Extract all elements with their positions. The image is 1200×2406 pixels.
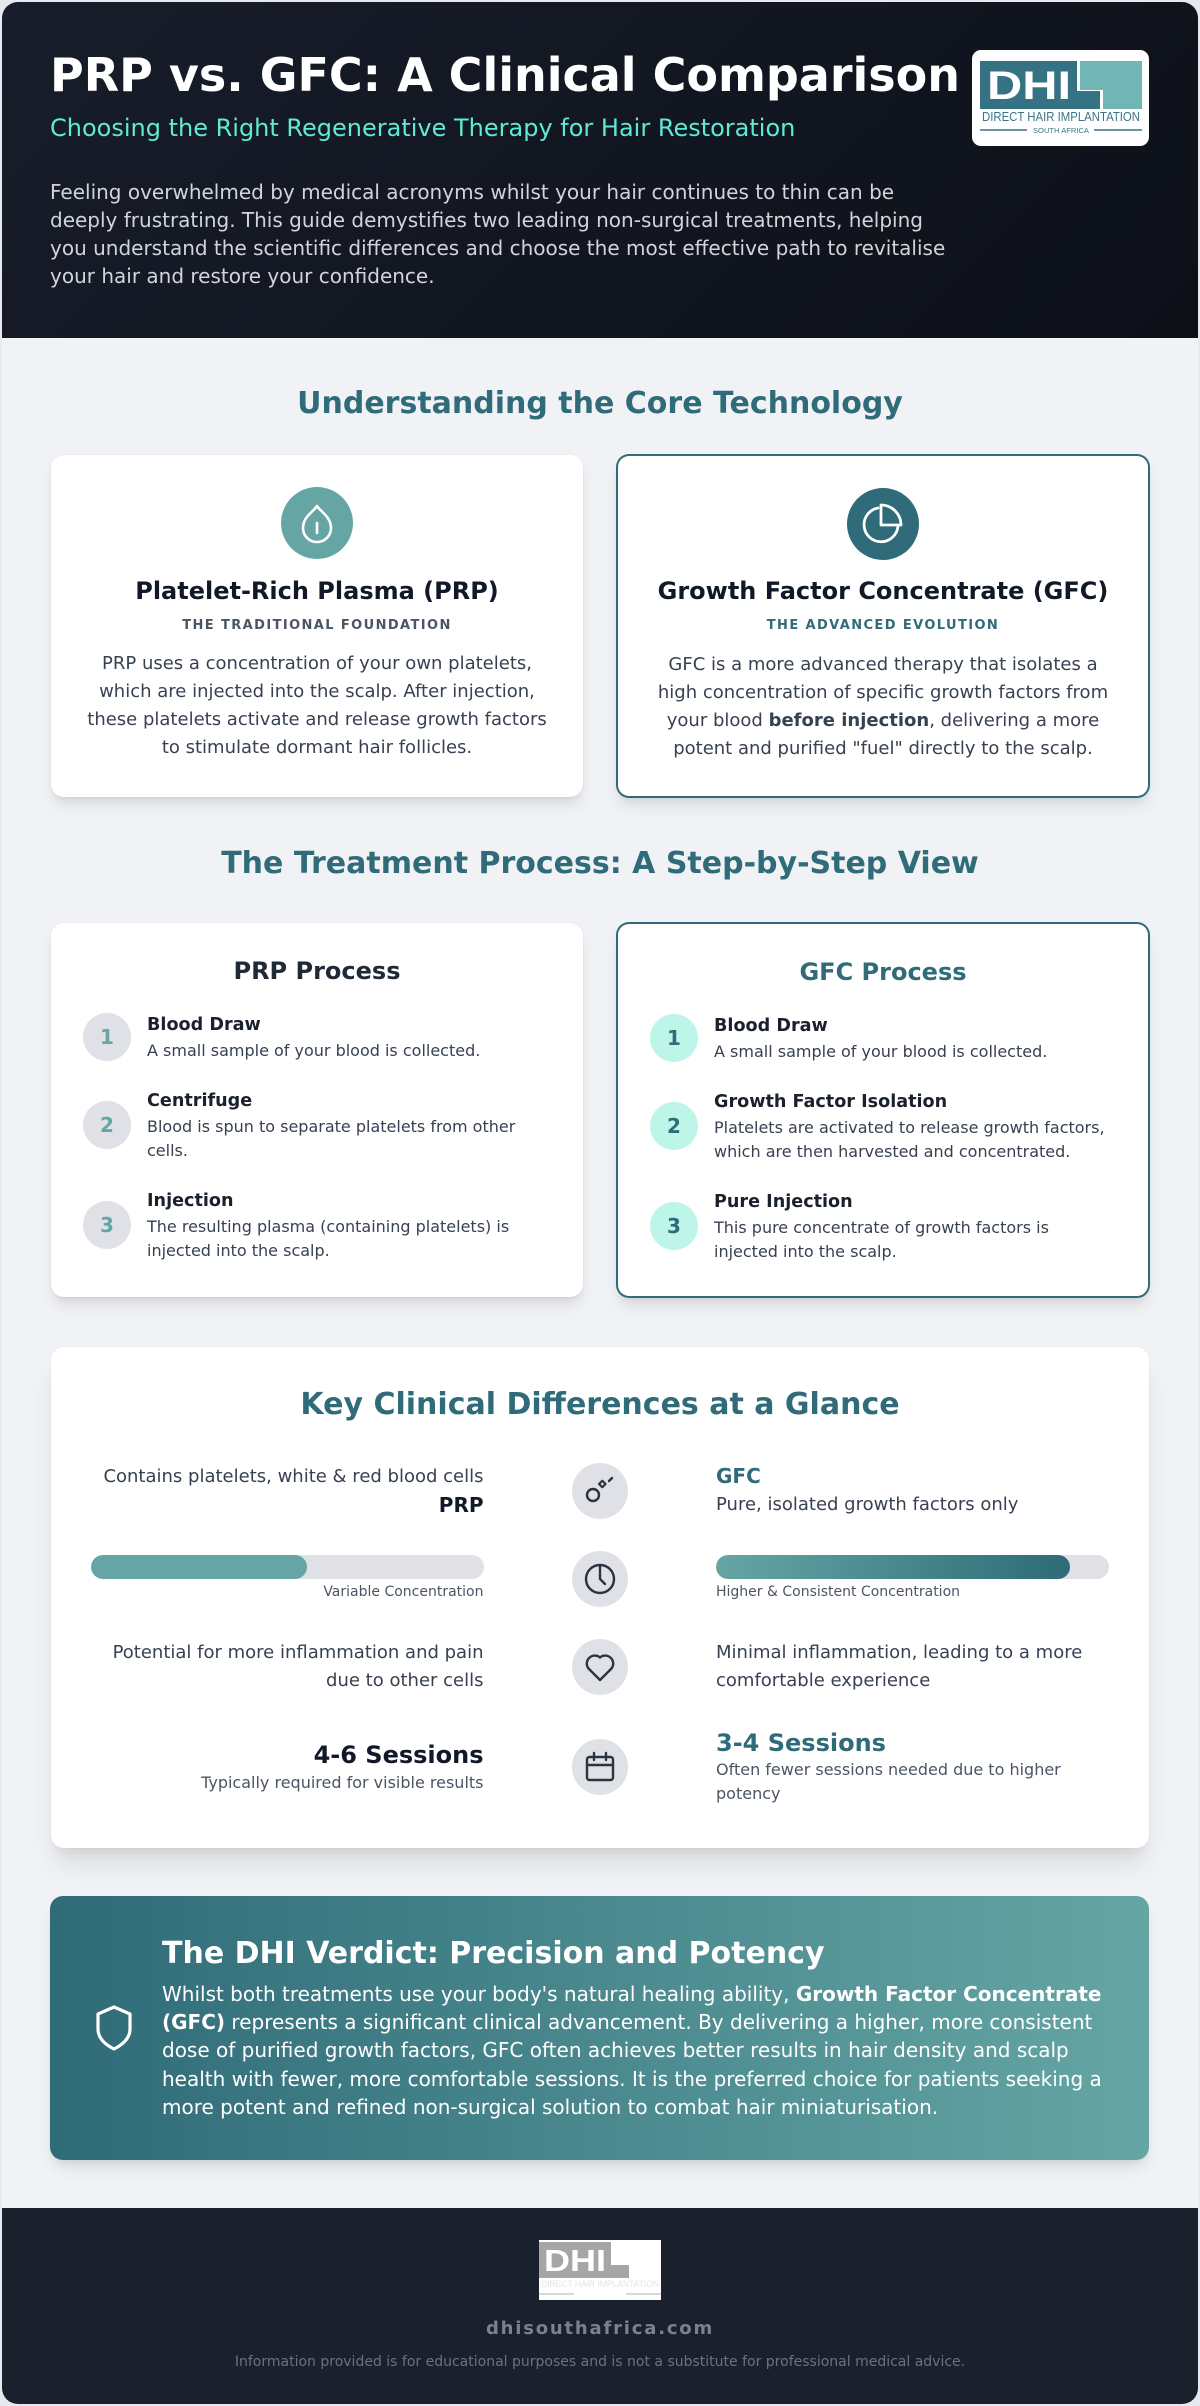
step description: A small sample of your blood is collected.	[147, 1041, 480, 1060]
step description: which are then harvested and concentrated.	[714, 1142, 1070, 1161]
disclaimer: Information provided is for educational purposes and is not a substitute for professional medical advice.	[235, 2354, 965, 2370]
step number	[650, 1202, 698, 1250]
header panel	[0, 0, 1200, 338]
card text	[658, 654, 1108, 759]
verdict text	[162, 1982, 1102, 2119]
step number: 3	[100, 1213, 114, 1237]
panel: GFC process	[616, 922, 1150, 1298]
PRP composition	[103, 1466, 484, 1517]
card text: these platelets activate and release growth factors	[87, 709, 547, 730]
PRP bar label: Variable Concentration	[323, 1584, 484, 1600]
step title: Pure Injection	[714, 1192, 853, 1212]
panel heading: Key Clinical Differences at a Glance	[300, 1386, 900, 1422]
step 3	[83, 1191, 509, 1260]
intro text: your hair and restore your confidence.	[50, 264, 435, 288]
step 3	[650, 1192, 1049, 1261]
title: PRP vs. GFC: A Clinical Comparison	[50, 48, 960, 102]
PRP sessions: 4-6 Sessions	[314, 1741, 484, 1769]
panel: GFC technology	[616, 454, 1150, 798]
GFC sessions: 3-4 Sessions	[716, 1729, 886, 1757]
verdict text: dose of purified growth factors, GFC often achieves better results in hair density and scalp	[162, 2038, 1069, 2062]
step number	[83, 1201, 131, 1249]
card title: Platelet-Rich Plasma (PRP)	[135, 577, 499, 605]
step description: This pure concentrate of growth factors is	[714, 1218, 1049, 1237]
step title: Injection	[147, 1191, 234, 1211]
card title: Growth Factor Concentrate (GFC)	[658, 577, 1108, 605]
card subtitle: THE TRADITIONAL FOUNDATION	[182, 618, 452, 633]
GFC composition	[716, 1464, 1018, 1515]
GFC composition: GFC	[716, 1464, 761, 1488]
step 2	[650, 1092, 1105, 1161]
footer logo	[539, 2240, 661, 2300]
verdict text: (GFC) represents a significant clinical advancement. By delivering a higher, more consistent	[162, 2010, 1092, 2034]
intro text: Feeling overwhelmed by medical acronyms whilst your hair continues to thin can be	[50, 180, 894, 204]
bar fill	[91, 1555, 307, 1579]
heading: core technology: Understanding the Core Technology	[297, 386, 903, 420]
panel: PRP technology	[51, 455, 583, 797]
GFC inflammation: Minimal inflammation, leading to a more	[716, 1642, 1082, 1662]
PRP concentration bar	[91, 1555, 484, 1579]
icon: pie chart	[847, 488, 919, 560]
icon: water drop	[281, 487, 353, 559]
step 1	[83, 1013, 480, 1061]
step number: 2	[667, 1114, 681, 1138]
GFC bar label: Higher & Consistent Concentration	[716, 1584, 960, 1600]
step description	[714, 1218, 1049, 1261]
step number	[83, 1013, 131, 1061]
panel: PRP process	[51, 923, 583, 1297]
intro text: you understand the scientific differences and choose the most effective path to revitalise	[50, 236, 945, 260]
intro text	[50, 180, 945, 288]
logo: DHI	[972, 50, 1149, 146]
panel: DHI verdict	[50, 1896, 1149, 2160]
GFC sessions note	[716, 1760, 1061, 1803]
intro text: deeply frustrating. This guide demystifies two leading non-surgical treatments, helping	[50, 208, 923, 232]
logo: DHI: SOUTH AFRICA	[1033, 126, 1089, 135]
step number: 2	[100, 1113, 114, 1137]
GFC inflammation: comfortable experience	[716, 1670, 930, 1690]
panel: key clinical differences	[51, 1347, 1149, 1848]
step description	[147, 1117, 516, 1160]
step description: Platelets are activated to release growth factors,	[714, 1118, 1105, 1137]
icon: heart	[572, 1639, 628, 1695]
icon: composition	[572, 1463, 628, 1519]
card text: PRP uses a concentration of your own platelets,	[102, 653, 532, 674]
card text: potent and purified "fuel" directly to the scalp.	[673, 738, 1093, 759]
verdict text: health with fewer, more comfortable sessions. It is the preferred choice for patients seeking a	[162, 2067, 1102, 2091]
step description: The resulting plasma (containing platelets) is	[147, 1217, 509, 1236]
PRP inflammation: Potential for more inflammation and pain	[113, 1642, 484, 1662]
PRP inflammation: due to other cells	[326, 1670, 484, 1690]
PRP composition: PRP	[439, 1493, 484, 1517]
step description: cells.	[147, 1141, 188, 1160]
step number: 3	[667, 1214, 681, 1238]
step description: Blood is spun to separate platelets from other	[147, 1117, 515, 1136]
GFC concentration bar	[716, 1555, 1109, 1579]
icon: calendar	[572, 1739, 628, 1795]
step title: Growth Factor Isolation	[714, 1092, 947, 1112]
step number: 1	[667, 1026, 681, 1050]
website: dhisouthafrica.com	[486, 2318, 714, 2339]
card text: which are injected into the scalp. After injection,	[99, 681, 535, 702]
verdict text: more potent and refined non-surgical solution to combat hair miniaturisation.	[162, 2095, 938, 2119]
card text	[87, 653, 547, 758]
step description: injected into the scalp.	[714, 1242, 897, 1261]
verdict heading: The DHI Verdict: Precision and Potency	[162, 1936, 825, 1971]
card text: to stimulate dormant hair follicles.	[162, 737, 472, 758]
step number	[83, 1101, 131, 1149]
footer panel	[0, 2208, 1200, 2406]
step title: Blood Draw	[147, 1015, 261, 1035]
icon: clock	[572, 1551, 628, 1607]
step 2	[83, 1091, 516, 1160]
step description: injected into the scalp.	[147, 1241, 330, 1260]
heading: treatment process: The Treatment Process: A Step-by-Step View	[221, 846, 979, 880]
GFC inflammation	[716, 1642, 1082, 1690]
subtitle: Choosing the Right Regenerative Therapy for Hair Restoration	[50, 114, 795, 142]
GFC sessions note: potency	[716, 1784, 780, 1803]
bar fill	[716, 1555, 1070, 1579]
step 1	[650, 1014, 1047, 1062]
step description: A small sample of your blood is collected.	[714, 1042, 1047, 1061]
step title: Blood Draw	[714, 1016, 828, 1036]
card subtitle: THE ADVANCED EVOLUTION	[767, 618, 999, 633]
step number: 1	[100, 1025, 114, 1049]
step description	[146, 1217, 509, 1260]
step number	[650, 1102, 698, 1150]
GFC composition: Pure, isolated growth factors only	[716, 1494, 1018, 1515]
logo: DHI: DHI	[987, 64, 1071, 108]
step description	[714, 1118, 1105, 1161]
verdict text: Whilst both treatments use your body's natural healing ability, Growth Factor Concentrate	[162, 1982, 1101, 2006]
card text: GFC is a more advanced therapy that isolates a	[668, 654, 1098, 675]
GFC sessions note: Often fewer sessions needed due to higher	[716, 1760, 1061, 1779]
PRP composition: Contains platelets, white & red blood cells	[103, 1466, 484, 1487]
card text: your blood before injection, delivering a more	[667, 710, 1099, 731]
step title: Centrifuge	[147, 1091, 252, 1111]
process heading: PRP Process	[233, 957, 400, 985]
process heading: GFC Process	[799, 958, 967, 986]
PRP inflammation	[113, 1642, 484, 1690]
step number	[650, 1014, 698, 1062]
PRP sessions note: Typically required for visible results	[201, 1773, 484, 1792]
footer logo: DHI	[544, 2243, 606, 2278]
card text: high concentration of specific growth factors from	[658, 682, 1108, 703]
icon: shield	[96, 2005, 132, 2051]
